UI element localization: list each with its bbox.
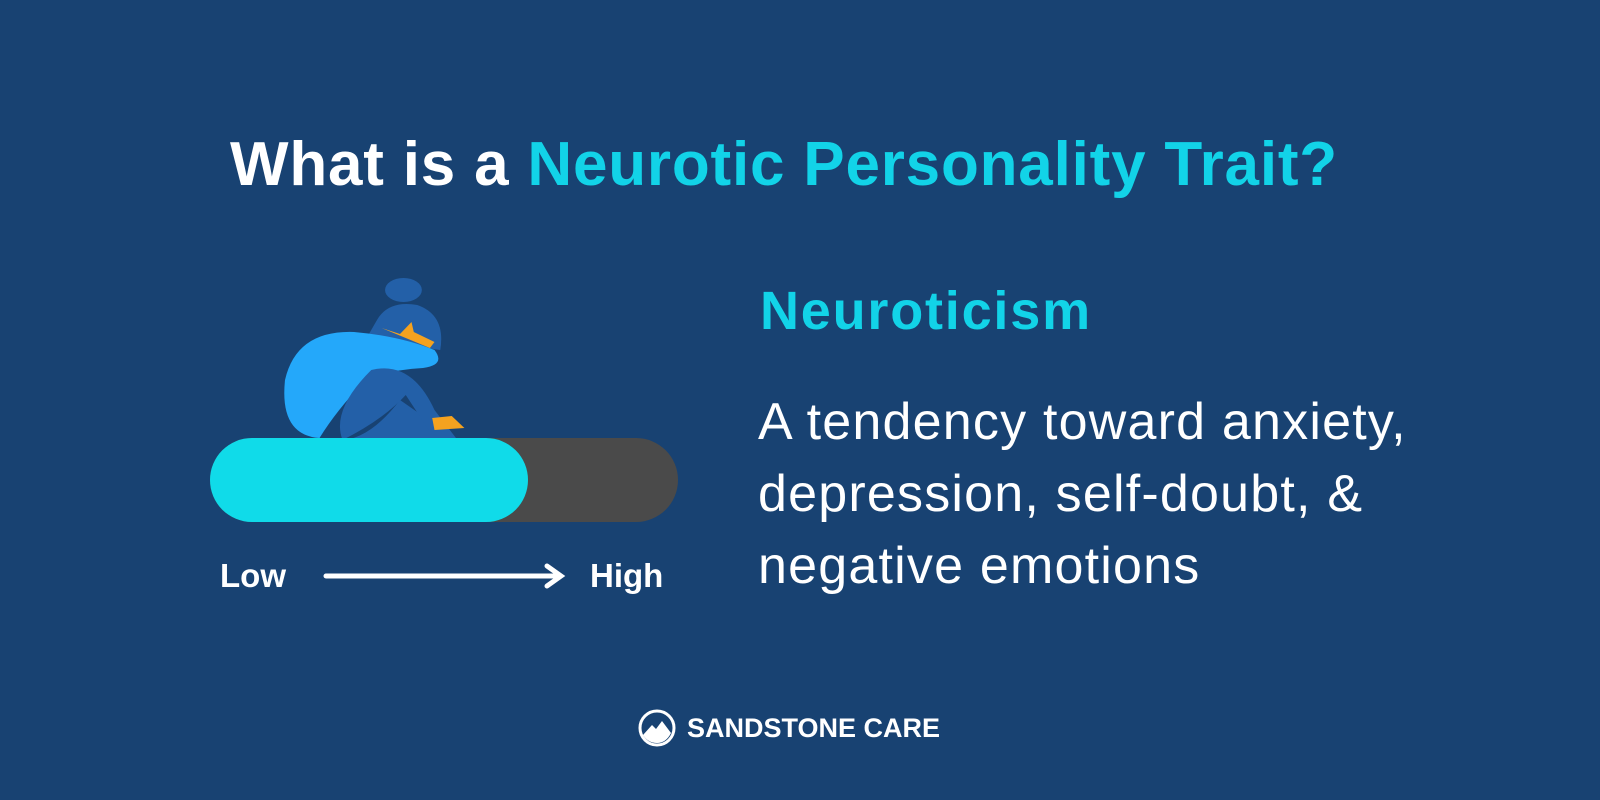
icon: sitting person	[284, 278, 464, 441]
heading: Neuroticism: Neuroticism	[760, 281, 1092, 341]
arrow	[326, 566, 561, 586]
bar: progress track	[210, 438, 678, 522]
logo: Sandstone Care	[638, 710, 940, 746]
logo: Sandstone Care: SANDSTONE CARE	[687, 712, 940, 742]
label: Low: Low	[220, 557, 286, 594]
text: definition	[758, 393, 1407, 595]
text: definition: A tendency toward anxiety,	[758, 393, 1407, 451]
text: definition: depression, self-doubt, &	[758, 465, 1363, 523]
label: High: High	[590, 557, 663, 594]
title: What is a Neurotic Personality Trait?	[230, 130, 1338, 199]
illustration: person sitting on scale bar	[210, 278, 678, 594]
text: definition: negative emotions	[758, 537, 1200, 595]
